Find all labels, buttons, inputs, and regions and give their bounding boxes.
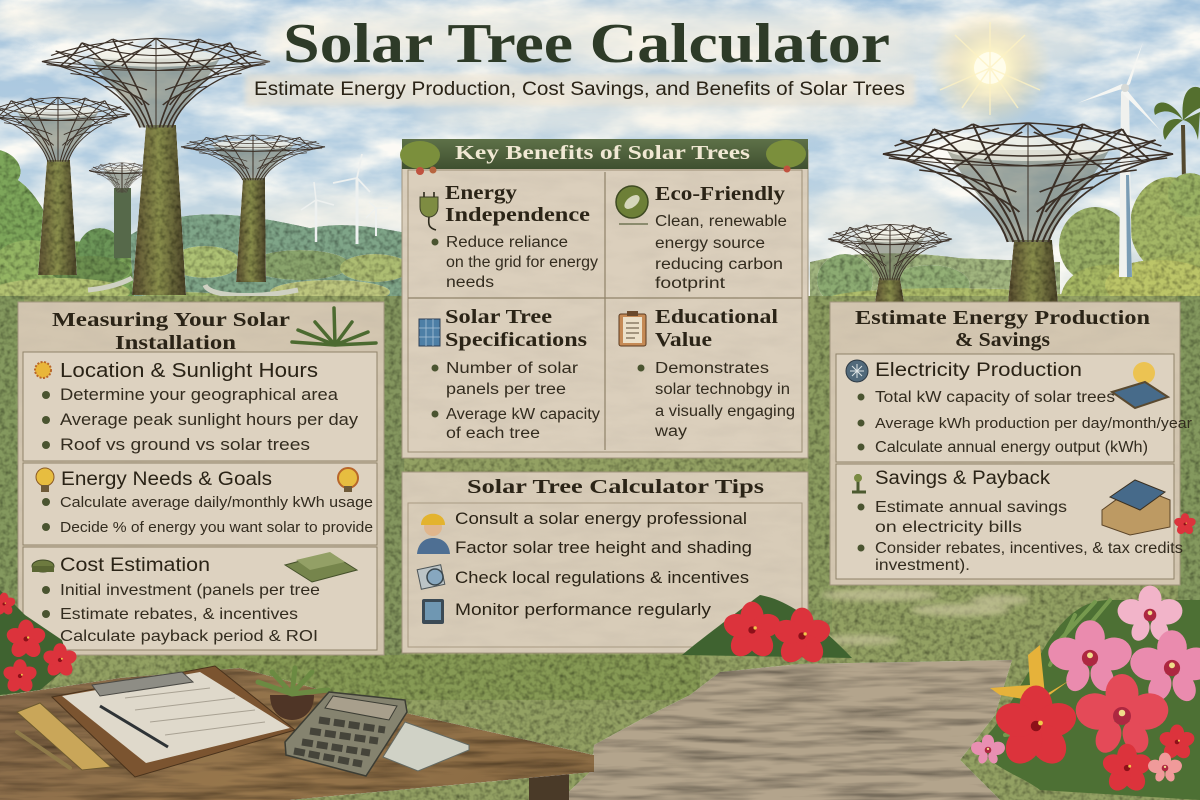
sub-panel: electricity production: Total kW capacity of solar trees [875, 389, 1115, 406]
wind turbines: distant [301, 154, 388, 244]
benefit: energy independence: Independence [445, 204, 590, 226]
supertree: small back left [89, 163, 155, 258]
benefit: solar tree specifications: Number of solar [446, 360, 578, 377]
sub-panel: cost estimation: Estimate rebates, & incentives [60, 606, 298, 623]
panel: solar tree calculator tips: Consult a solar energy professional [455, 510, 747, 528]
pencil [17, 732, 70, 768]
sub-panel: savings and payback: on electricity bills [875, 519, 1022, 536]
icon: solar panel [419, 319, 440, 346]
benefit: energy independence [420, 182, 598, 291]
panel heading [855, 308, 1150, 351]
benefit: educational value [619, 306, 795, 440]
sub-panel: location and sunlight hours: Roof vs ground vs solar trees [60, 435, 310, 454]
icon: coins [32, 560, 54, 572]
panel heading: Measuring Your Solar [52, 309, 290, 331]
sub-panel: energy needs and goals: Energy Needs & Goals [61, 469, 272, 490]
benefit: solar tree specifications: Solar Tree [445, 306, 552, 328]
garden paths [88, 278, 298, 295]
supertree: far left [0, 97, 130, 275]
icon: engineer with hard hat [417, 514, 450, 554]
sub-panel: savings and payback [836, 464, 1183, 579]
icon: electricity badge [846, 360, 868, 382]
sub-panel: electricity production [836, 354, 1192, 462]
icon: plant in hand [852, 474, 866, 492]
background: sky [0, 0, 1200, 310]
sub-panel: savings and payback: Consider rebates, incentives, & tax credits [875, 540, 1183, 557]
benefit: eco-friendly [616, 183, 787, 292]
flowers: large bouquet bottom right [970, 586, 1200, 800]
benefit: solar tree specifications: Specifications [445, 329, 587, 351]
palm tree [1154, 87, 1200, 182]
benefit: energy independence: Reduce reliance [446, 234, 568, 251]
icon: fern [292, 308, 376, 345]
icon: sun [928, 6, 1052, 130]
subtitle [245, 74, 915, 106]
sub-panel: cost estimation [23, 547, 377, 650]
wind turbine: large right [1078, 42, 1160, 277]
benefit: educational value: way [654, 423, 687, 440]
ruler [17, 703, 111, 770]
sub-panel: energy needs and goals: Decide % of energy you want solar to provide [60, 519, 373, 536]
papers [383, 722, 469, 771]
panel: measuring your solar installation [18, 302, 384, 655]
benefit: energy independence: Energy [445, 182, 517, 204]
sub-panel: savings and payback: Savings & Payback [875, 468, 1051, 489]
background: distant hills [130, 214, 1060, 305]
sub-panel: location and sunlight hours: Determine your geographical area [60, 385, 339, 404]
icon: banknotes [285, 552, 357, 582]
benefit: eco-friendly: energy source [655, 235, 765, 252]
benefit: educational value: solar technobgy in [655, 381, 790, 398]
icon: plug [420, 192, 438, 230]
sub-panel: electricity production: Calculate annual energy output (kWh) [875, 439, 1148, 456]
sub-panel: energy needs and goals [23, 463, 377, 545]
benefit: energy independence: needs [446, 274, 494, 291]
panel heading: Estimate Energy Production [855, 308, 1150, 329]
benefit: solar tree specifications: panels per tree [446, 381, 566, 398]
sub-panel: savings and payback: investment). [875, 557, 970, 574]
supertree: small right [828, 224, 952, 302]
supertree: centre of left group [181, 135, 325, 282]
panel heading [52, 309, 290, 354]
panel: solar tree calculator tips: Factor solar tree height and shading [455, 539, 752, 557]
icon: sun small [35, 362, 51, 378]
benefit: educational value: Value [655, 329, 712, 351]
table top [0, 668, 594, 800]
sub-panel: cost estimation: Calculate payback period & ROI [60, 628, 318, 645]
supertree: large left [42, 38, 270, 295]
panel heading: & Savings [955, 330, 1050, 351]
icon: magnifier on document [417, 565, 445, 589]
sub-panel: cost estimation: Cost Estimation [60, 555, 210, 576]
icon: tablet [422, 599, 444, 624]
sub-panel: location and sunlight hours: Average peak sunlight hours per day [60, 410, 359, 429]
benefit: eco-friendly: Clean, renewable [655, 213, 787, 230]
heading ribbon: Key Benefits of Solar Trees [455, 142, 750, 164]
panel: solar tree calculator tips: Check local regulations & incentives [455, 569, 749, 587]
sub-panel: energy needs and goals: Calculate average daily/monthly kWh usage [60, 494, 373, 511]
grass patches [820, 589, 1030, 645]
benefit: eco-friendly: reducing carbon [655, 256, 783, 273]
panel: solar tree calculator tips [402, 472, 808, 653]
panel: solar tree calculator tips: Solar Tree Calculator Tips [467, 476, 764, 498]
benefit: eco-friendly: Eco-Friendly [655, 183, 785, 205]
benefit: energy independence: on the grid for energy [446, 254, 598, 271]
sub-panel: cost estimation: Initial investment (panels per tree [60, 582, 320, 599]
panel: estimate energy production and savings [830, 302, 1192, 585]
flowers: small red at right panel [1173, 513, 1197, 536]
sub-panel: savings and payback: Estimate annual savings [875, 499, 1067, 516]
supertree: large right [883, 123, 1173, 302]
ornament: leaves left [400, 141, 440, 175]
benefit: eco-friendly: footprint [655, 275, 726, 292]
benefit: educational value: Demonstrates [655, 360, 769, 377]
icon: leaf badge [616, 186, 648, 224]
panel heading: Installation [115, 332, 236, 354]
icon: clipboard [619, 311, 646, 346]
sub-panel: electricity production: Average kWh production per day/month/year [875, 416, 1192, 432]
title: Solar Tree Calculator [283, 13, 890, 75]
benefit: solar tree specifications: Average kW capacity [446, 406, 600, 423]
flowers: left edge [0, 590, 78, 695]
table with calculator and clipboard [0, 666, 594, 800]
flowers: hibiscus at tips panel [682, 595, 852, 667]
ornament: leaves right [766, 140, 806, 172]
benefit: solar tree specifications [419, 306, 600, 442]
succulent in pot [258, 668, 328, 720]
sub-panel: location and sunlight hours [23, 352, 377, 461]
panel: key benefits of solar trees [400, 139, 808, 458]
subtitle: Estimate Energy Production, Cost Savings, and Benefits of Solar Trees [254, 79, 905, 100]
benefit: educational value: a visually engaging [655, 403, 795, 420]
icon: light bulb right [338, 468, 358, 492]
icon: solar panel on crate [1102, 480, 1170, 535]
benefit: educational value: Educational [655, 306, 779, 328]
icon: solar panel with sun [1112, 362, 1168, 408]
panel: solar tree calculator tips: Monitor performance regularly [455, 601, 712, 619]
foliage: left garden [0, 150, 410, 308]
background: ground grass [0, 296, 1200, 800]
sub-panel: electricity production: Electricity Production [875, 360, 1082, 381]
icon: light bulb [36, 468, 54, 492]
sub-panel: location and sunlight hours: Location & Sunlight Hours [60, 360, 318, 382]
clipboard [52, 666, 295, 777]
ground: dirt path [560, 660, 1012, 800]
heading ribbon [402, 139, 808, 169]
foliage: right garden [817, 173, 1200, 330]
benefit: solar tree specifications: of each tree [446, 425, 540, 442]
calculator [285, 692, 407, 776]
